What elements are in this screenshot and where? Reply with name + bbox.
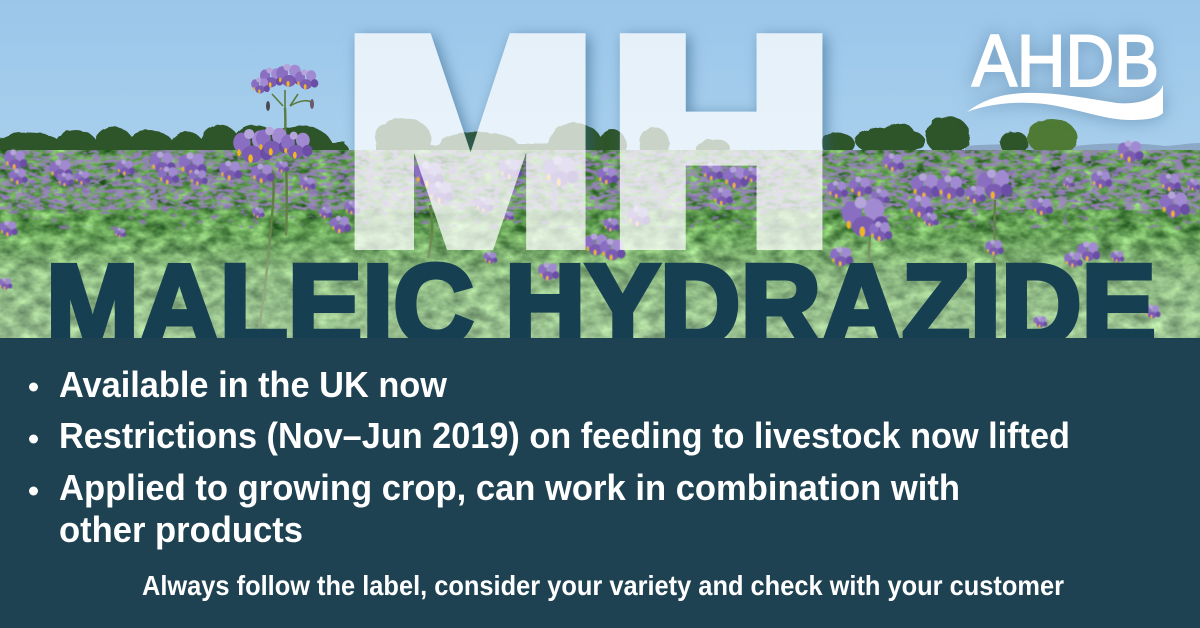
MH letterforms (345, 0, 832, 301)
AHDB logo (967, 21, 1163, 120)
large translucent letters: MH (350, 28, 835, 250)
panel background (0, 338, 1200, 628)
distant hills (965, 143, 1200, 150)
scattered distant flowers (0, 172, 1200, 200)
footer note: Always follow the label, consider your variety and check with your customer (142, 570, 1064, 601)
flower band near horizon (0, 153, 1200, 171)
bullet list (29, 364, 1070, 550)
photo: potato field under blue sky (0, 0, 1200, 338)
logo swoosh (967, 85, 1163, 120)
sky (0, 0, 1200, 160)
field base foliage (0, 153, 1200, 338)
logo wordmark: AHDB (972, 21, 1159, 102)
MH drop shadow (350, 28, 835, 150)
panel: key points (0, 338, 1200, 628)
headline: Maleic Hydrazide: MALEIC HYDRAZIDE (46, 242, 1156, 369)
bullet 1: Available in the UK now (59, 364, 448, 405)
bullet 3 (29, 467, 960, 550)
bullet 2: Restrictions (Nov–Jun 2019) on feeding to livestock now lifted (59, 415, 1070, 456)
bullet 3: Applied to growing crop, can work in combination with (59, 467, 960, 508)
bullet 3: other products (59, 509, 303, 550)
tall flower stems (258, 108, 995, 338)
tall flower head (233, 64, 318, 163)
tree line (0, 116, 1078, 150)
wash over lower field (0, 208, 1200, 338)
potato flower clusters (0, 140, 1200, 328)
